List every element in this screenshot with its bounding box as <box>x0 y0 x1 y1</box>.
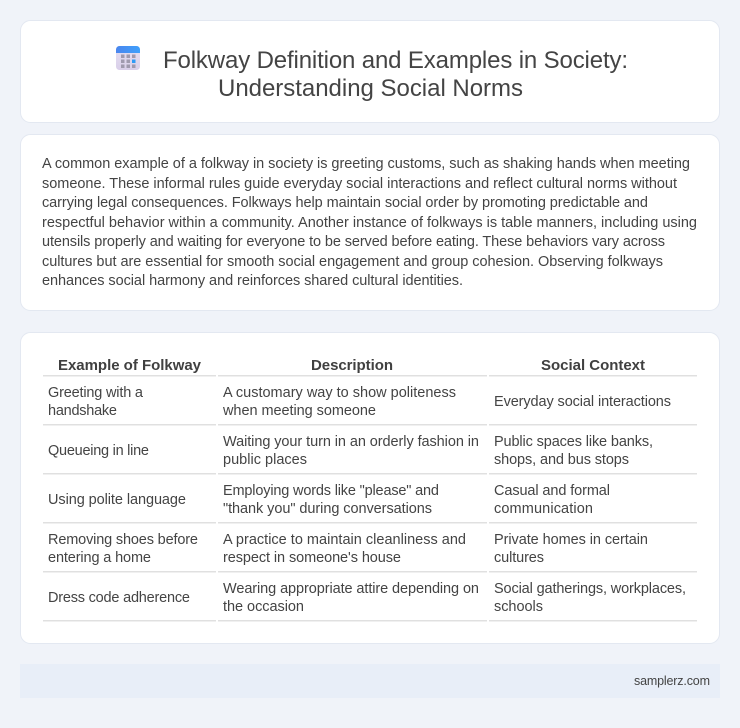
table row: queueing: shops, and bus stops <box>494 452 629 468</box>
table header row <box>58 357 645 374</box>
table row: polite language: Casual and formal <box>494 483 610 499</box>
table row: polite language: communication <box>494 501 593 517</box>
table row: removing shoes: Private homes in certain <box>494 532 648 548</box>
table row: queueing: Queueing in line <box>48 443 149 459</box>
table row: polite language: "thank you" during conversations <box>223 501 432 517</box>
text block: paragraph <box>42 156 697 289</box>
text block: paragraph: A common example of a folkway in society is greeting customs, such as shaking hands when meeting <box>42 156 690 172</box>
panel: title card <box>20 20 720 122</box>
table row: queueing: public places <box>223 452 307 468</box>
table row: dress code: schools <box>494 599 543 615</box>
table row: greeting: handshake <box>48 403 117 419</box>
title: Understanding Social Norms <box>218 75 523 102</box>
title: Folkway Definition and Examples in Society: <box>163 47 628 74</box>
table row: polite language: Employing words like "please" and <box>223 483 439 499</box>
table row: dress code: Dress code adherence <box>48 590 190 606</box>
table row: queueing: Public spaces like banks, <box>494 434 653 450</box>
table row: polite language <box>48 483 610 517</box>
table row: removing shoes: respect in someone's house <box>223 550 401 566</box>
table row: removing shoes: entering a home <box>48 550 151 566</box>
table row: dress code: the occasion <box>223 599 304 615</box>
text block: paragraph: carrying legal consequences. Folkways help maintain social order by promoting predictable and <box>42 195 648 211</box>
icon: calendar <box>116 46 140 70</box>
text block: paragraph: someone. These informal rules guide everyday social interactions and reflect cultural norms without <box>42 176 677 192</box>
title <box>163 47 628 102</box>
table row: queueing <box>48 434 653 468</box>
table row: dress code <box>48 581 686 615</box>
text block: paragraph: cultures but are essential for smooth social engagement and group cohesion. Observing folkways <box>42 254 663 270</box>
text block: paragraph: respectful behavior within a community. Another instance of folkways is table manners, including using <box>42 215 697 231</box>
footer bar <box>20 664 720 698</box>
table row: polite language: Using polite language <box>48 492 186 508</box>
table row: greeting <box>48 385 671 419</box>
table header row: Description <box>311 357 393 374</box>
panel: folkway table <box>20 332 720 644</box>
table row: greeting: Everyday social interactions <box>494 394 671 410</box>
table row: dress code: Social gatherings, workplaces, <box>494 581 686 597</box>
table row: queueing: Waiting your turn in an orderly fashion in <box>223 434 479 450</box>
table row: removing shoes: A practice to maintain cleanliness and <box>223 532 466 548</box>
panel: introduction text <box>20 134 720 310</box>
table row: dress code: Wearing appropriate attire depending on <box>223 581 479 597</box>
text block: paragraph: enhances social harmony and reinforces shared cultural identities. <box>42 273 463 289</box>
table header row: Example of Folkway <box>58 357 202 374</box>
table row: removing shoes <box>48 532 648 566</box>
footer source text: samplerz.com <box>634 674 710 688</box>
table row: greeting: when meeting someone <box>222 403 376 419</box>
table row: removing shoes: cultures <box>494 550 544 566</box>
table row: greeting: A customary way to show politeness <box>223 385 456 401</box>
text block: paragraph: utensils properly and waiting for everyone to be served before eating. These behaviors vary across <box>42 234 665 250</box>
table row: removing shoes: Removing shoes before <box>48 532 198 548</box>
table header row: Social Context <box>541 357 645 374</box>
table row: greeting: Greeting with a <box>48 385 144 401</box>
